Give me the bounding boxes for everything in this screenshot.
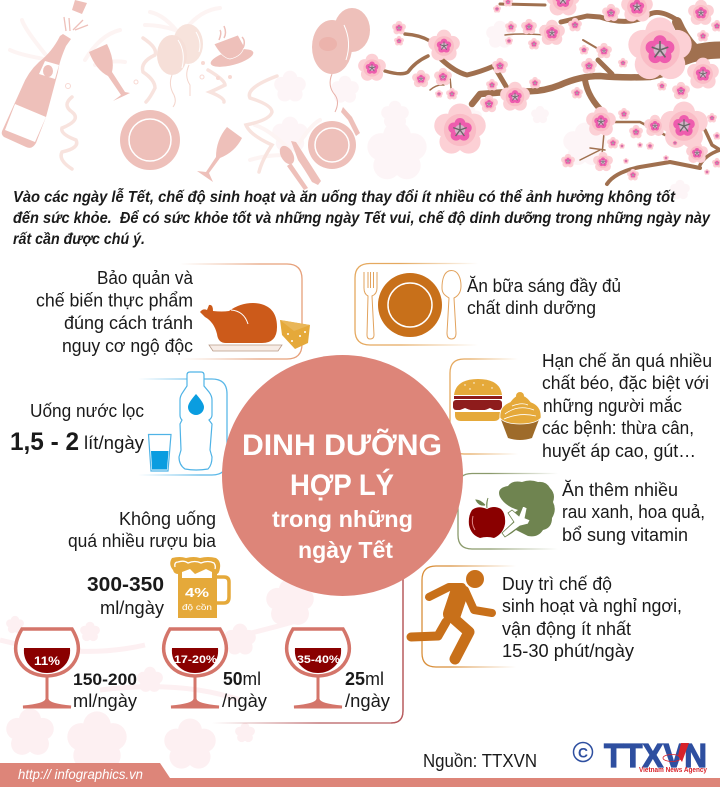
chart: wine 11%: 11%: [34, 656, 60, 668]
text: limit fat: chất béo, đặc biệt với: [542, 373, 709, 393]
panel: exercise: [411, 566, 682, 667]
text: food safety: chế biến thực phẩm: [36, 290, 193, 310]
logo: TTXVN: TTXVN: [604, 737, 707, 774]
footer band: [0, 763, 720, 787]
text: breakfast: Ăn bữa sáng đầy đủ: [467, 276, 621, 296]
panel: vegetables: [458, 474, 705, 549]
title: [242, 428, 442, 563]
text: vegetables: [562, 480, 705, 545]
confetti: [66, 62, 232, 88]
text: water: lít/ngày: [84, 433, 144, 453]
text: alcohol heading: Không uống: [119, 509, 216, 529]
title: ngày Tết: [298, 537, 393, 563]
chart: wine 11%: [16, 629, 78, 707]
text: wine 35-40% amount: 25ml: [345, 669, 384, 689]
text: breakfast: chất dinh dưỡng: [467, 298, 596, 318]
text: vegetables: Ăn thêm nhiều: [562, 480, 678, 500]
text: limit fat: các bệnh: thừa cân,: [542, 418, 694, 438]
text: water: [10, 401, 144, 456]
text: food safety: đúng cách tránh: [64, 313, 193, 333]
panel: alcohol: [16, 509, 403, 723]
text: wine 17-20% amount: [222, 669, 267, 711]
text: beer amount: ml/ngày: [100, 598, 164, 618]
icon: broccoli: [499, 480, 555, 537]
title: trong những: [272, 506, 413, 532]
branches: [385, 4, 720, 184]
intro text: Vào các ngày lễ Tết, chế độ sinh hoạt và ăn uống thay đổi ít nhiều có thể ảnh hưởng không tốt: [13, 189, 676, 206]
text: limit fat: huyết áp cao, gút…: [542, 441, 696, 461]
text: limit fat: Hạn chế ăn quá nhiều: [542, 351, 712, 371]
panel: limit fat: [450, 351, 712, 461]
chart: wine 17-20%: [164, 629, 226, 707]
icon: burger: [453, 379, 502, 421]
text: beer amount: [87, 574, 164, 618]
text: exercise: sinh hoạt và nghỉ ngơi,: [502, 596, 682, 616]
panel: breakfast: [355, 264, 621, 345]
icon: plate and cutlery: [364, 270, 461, 339]
chart: wine 35-40%: 35-40%: [297, 654, 340, 666]
icon: beer mug: 4%: [185, 585, 210, 600]
blossoms: [358, 0, 720, 180]
text: exercise: [502, 574, 682, 661]
icon: balloons: [157, 8, 370, 112]
icon: roast chicken and cheese: [200, 303, 310, 351]
icon: runner: [411, 570, 492, 659]
text: water: Uống nước lọc: [30, 401, 144, 421]
text: limit fat: [542, 351, 712, 461]
intro text: rất cần được chú ý.: [13, 231, 145, 248]
footer url: http:// infographics.vn: [18, 767, 143, 782]
icon: plates: [120, 110, 356, 170]
chart: wine 17-20%: 17-20%: [174, 654, 217, 666]
text: exercise: vận động ít nhất: [502, 619, 631, 639]
text: wine 35-40% amount: /ngày: [345, 691, 390, 711]
logo: TTXVN: C: [578, 744, 588, 760]
text: wine 35-40% amount: [345, 669, 390, 711]
text: water: 1,5 - 2: [10, 428, 79, 456]
icon: apple: [469, 498, 505, 538]
text: limit fat: những người mắc: [543, 395, 682, 416]
logo: TTXVN: Vietnam News Agency: [639, 765, 708, 774]
text: vegetables: rau xanh, hoa quả,: [562, 502, 705, 522]
icon: water bottle: [179, 372, 212, 470]
icon: cutlery: [277, 107, 360, 190]
text: food safety: Bảo quản và: [97, 268, 194, 288]
cherry blossom branch: [358, 0, 720, 184]
text: wine 11% amount: 150-200: [73, 670, 137, 689]
streamers: [61, 38, 277, 172]
icon: cupcake: [500, 392, 541, 440]
text: alcohol heading: quá nhiều rượu bia: [68, 531, 217, 551]
central circle: [222, 355, 463, 596]
text: beer amount: 300-350: [87, 574, 164, 596]
text: wine 11% amount: ml/ngày: [73, 691, 137, 711]
panel: water: [10, 372, 227, 475]
text: food safety: nguy cơ ngộ độc: [62, 336, 193, 356]
icon: wine glasses: [89, 44, 242, 182]
party illustration: [2, 0, 370, 190]
text: exercise: 15-30 phút/ngày: [502, 641, 634, 661]
intro text: [13, 189, 711, 248]
chart: wine 35-40%: [287, 629, 349, 707]
title: HỢP LÝ: [290, 468, 394, 502]
text: wine 17-20% amount: 50ml: [223, 669, 261, 689]
text: wine 11% amount: [73, 670, 137, 711]
text: vegetables: bổ sung vitamin: [562, 525, 688, 545]
source: Nguồn: TTXVN: [423, 751, 537, 771]
text: breakfast: [467, 276, 621, 318]
text: food safety: [36, 268, 194, 356]
panel: food safety: [36, 264, 310, 359]
icon: glass of water: [148, 434, 171, 471]
icon: beer mug: độ cồn: [182, 602, 212, 612]
icon: beer mug: [170, 557, 229, 618]
text: wine 17-20% amount: /ngày: [222, 691, 267, 711]
icon: champagne bottle: [2, 0, 88, 148]
icon: coffee cup: [209, 26, 255, 70]
title: DINH DƯỠNG: [242, 428, 442, 462]
text: exercise: Duy trì chế độ: [502, 574, 612, 594]
text: alcohol heading: [68, 509, 217, 551]
